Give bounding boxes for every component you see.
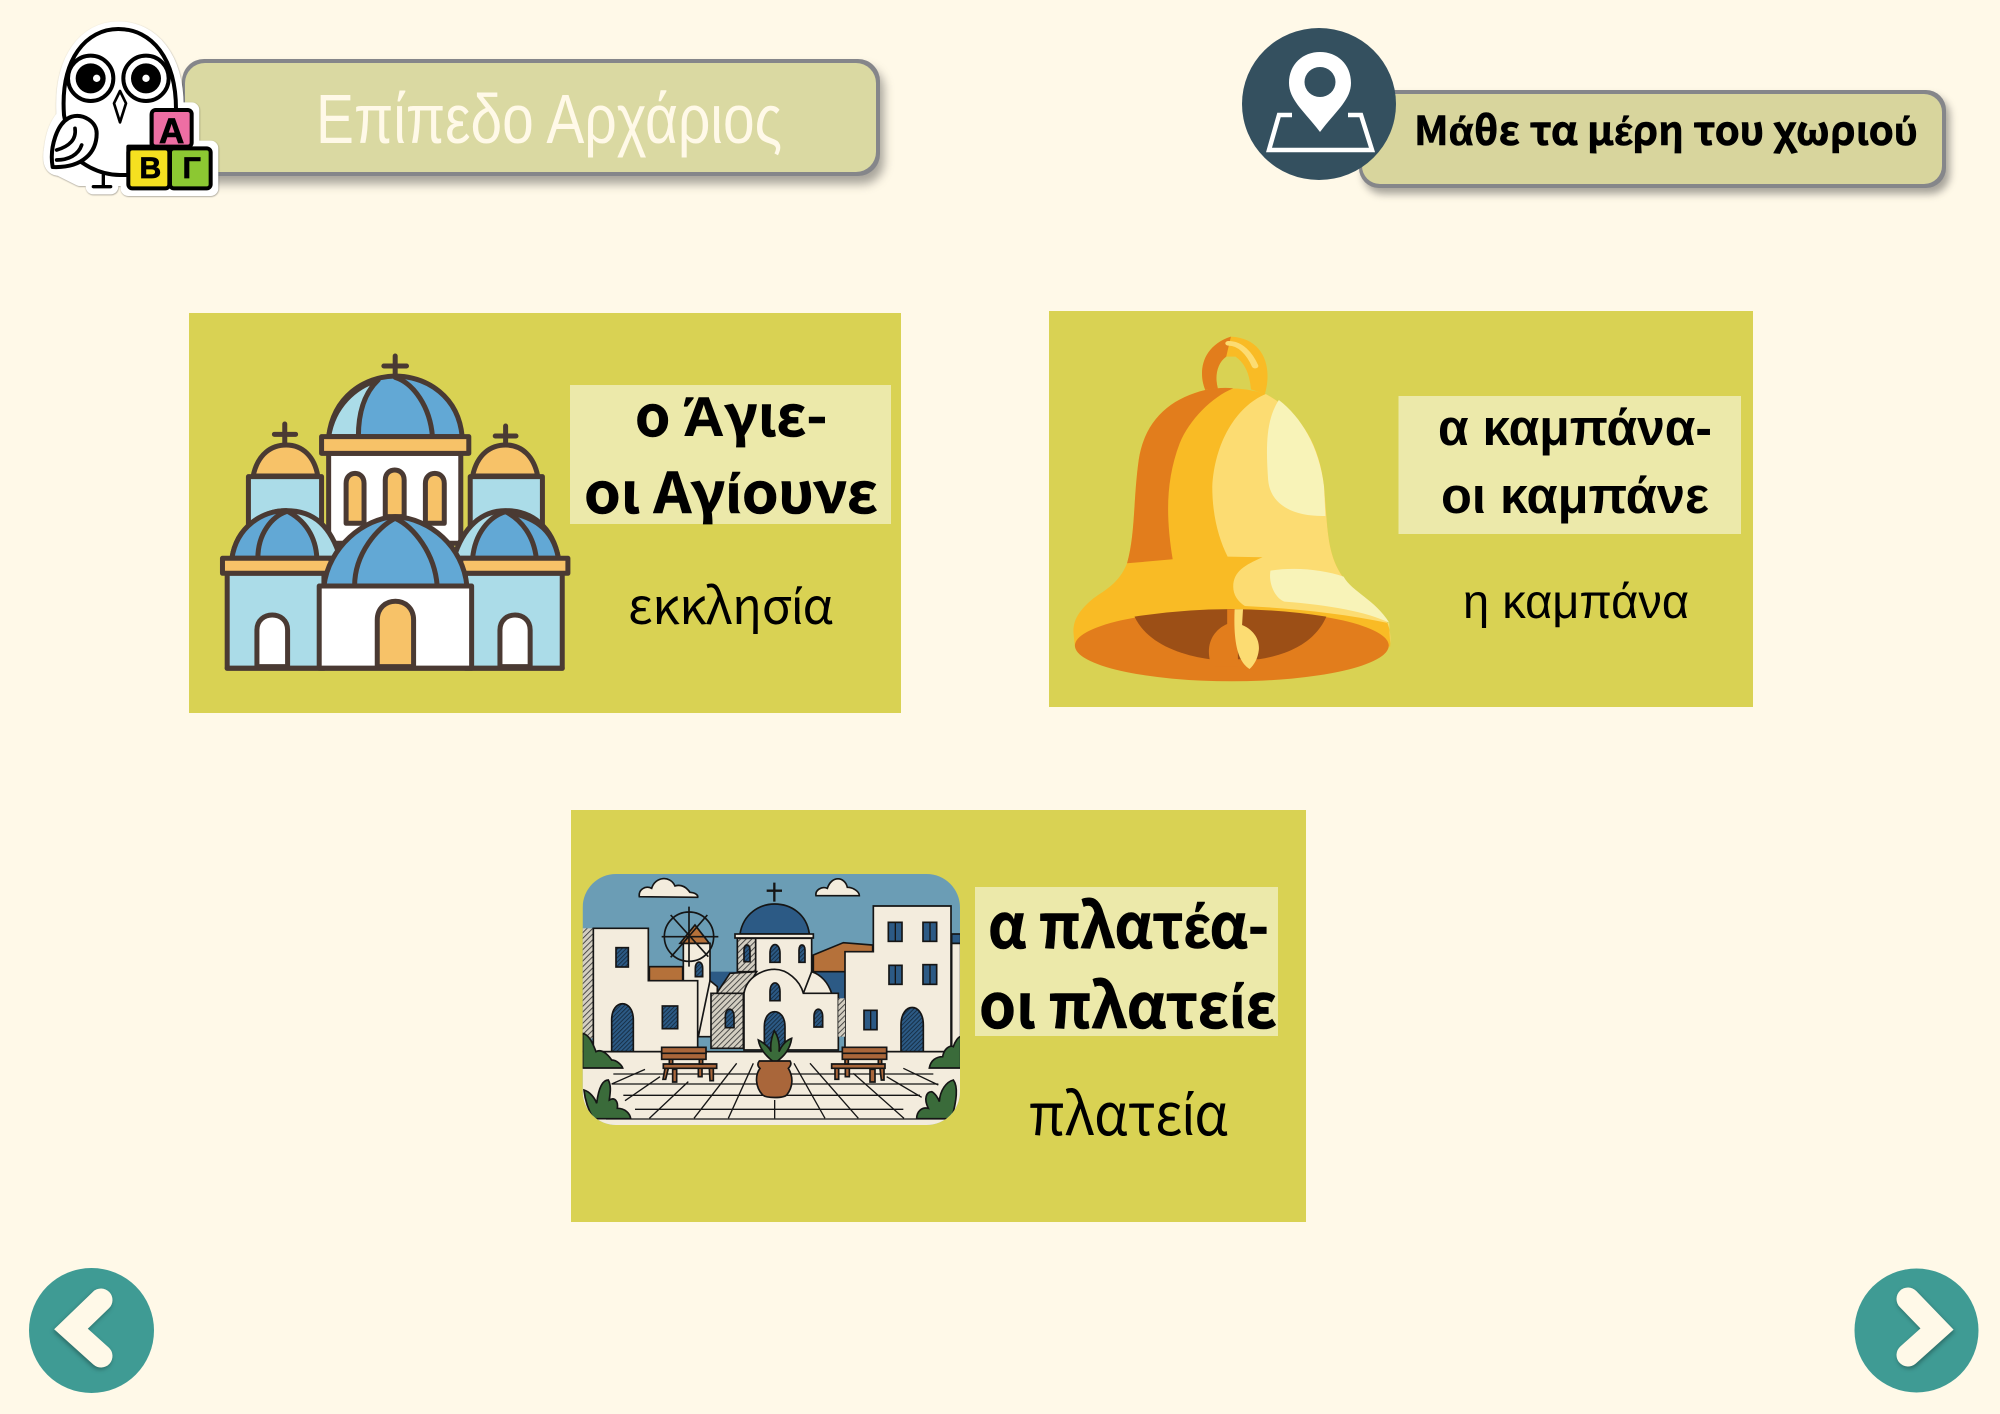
panel: square bbox=[571, 810, 1306, 1222]
label: bell: η καμπάνα bbox=[1463, 576, 1689, 629]
illustration: village square bbox=[583, 874, 961, 1125]
icon: owl with alphabet blocks: Γ bbox=[183, 152, 201, 185]
label: church: εκκλησία bbox=[628, 567, 833, 639]
icon: owl with alphabet blocks: Α bbox=[159, 112, 184, 151]
icon: map pin bbox=[1242, 28, 1396, 180]
header banner: level bbox=[182, 59, 880, 176]
panel: bell bbox=[1049, 311, 1753, 707]
arrow: previous bbox=[29, 1268, 154, 1393]
topic title: Μάθε τα μέρη του χωριού bbox=[1414, 98, 1918, 157]
header banner: topic bbox=[1359, 90, 1946, 188]
heading: church singular: ο Άγιε- bbox=[635, 372, 827, 453]
icon: owl with alphabet blocks: Β bbox=[139, 152, 161, 185]
highlight: church forms bbox=[570, 385, 891, 524]
label: square: πλατεία bbox=[1029, 1069, 1228, 1153]
panel: church bbox=[189, 313, 901, 713]
heading: bell plural: οι καμπάνε bbox=[1441, 467, 1709, 524]
highlight: bell forms bbox=[1398, 396, 1741, 534]
icon: owl with alphabet blocks bbox=[51, 29, 211, 188]
icon: bell bbox=[1073, 337, 1390, 681]
highlight: square forms bbox=[975, 887, 1278, 1036]
heading: bell singular: α καμπάνα- bbox=[1438, 399, 1712, 456]
icon: church bbox=[222, 356, 568, 668]
level title: Επίπεδο Αρχάριος bbox=[316, 80, 782, 158]
heading: square plural: οι πλατείε bbox=[979, 957, 1277, 1046]
heading: church plural: οι Αγίουνε bbox=[584, 448, 878, 530]
heading: square singular: α πλατέα- bbox=[988, 878, 1269, 967]
arrow: next bbox=[1854, 1268, 1978, 1392]
